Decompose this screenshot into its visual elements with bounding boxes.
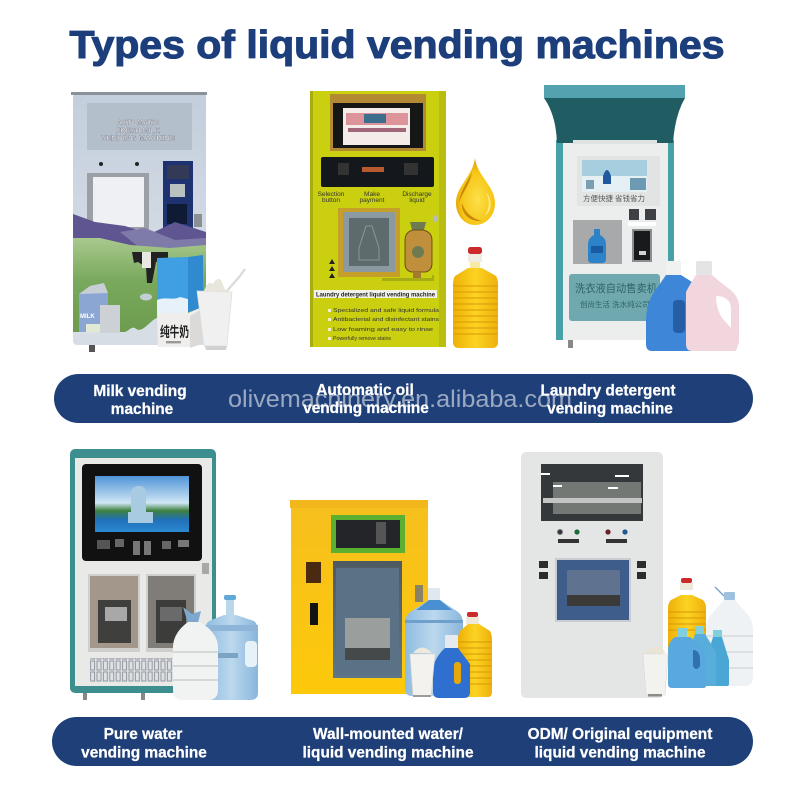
water jug [405, 588, 463, 696]
icon: oil drop [456, 158, 495, 225]
small blue bottle [709, 630, 729, 686]
panel: ODM original equipment liquid vending machine [521, 452, 753, 698]
machine body: payment [360, 197, 385, 204]
blue detergent bottle [646, 261, 692, 351]
machine body: Laundry detergent liquid vending machine [316, 292, 435, 298]
panel: automatic oil vending machine [310, 91, 498, 348]
panel: milk vending machine [71, 92, 245, 352]
machine body: Low foaming and easy to rinse [333, 327, 433, 333]
label: wall-mounted: Wall-mounted water/ [313, 726, 463, 743]
machine body [290, 500, 428, 694]
machine body: 方便快捷 省钱省力 [583, 193, 645, 203]
cow [132, 252, 168, 283]
label: pure water: Pure water [104, 726, 182, 743]
machine body: MILK [80, 314, 95, 320]
label: ODM: ODM/ Original equipment [528, 726, 712, 743]
panel: pure water vending machine [70, 449, 258, 700]
label: laundry: Laundry detergent [540, 382, 676, 400]
banner: bottom row [52, 717, 753, 766]
label: ODM: liquid vending machine [534, 744, 706, 762]
white water bottle [173, 607, 218, 700]
label: laundry: vending machine [547, 400, 673, 418]
label: wall-mounted: liquid vending machine [302, 744, 474, 762]
glass of milk [410, 648, 435, 697]
label: milk: Milk vending [93, 383, 187, 400]
machine body: AUTOMATIC [117, 118, 159, 127]
machine body: FRESH MILK [116, 126, 161, 135]
panel: wall-mounted water/liquid vending machine [290, 500, 492, 698]
machine body: Selection [318, 191, 345, 198]
milk carton [157, 255, 203, 348]
oil bottle [458, 612, 492, 697]
machine body: Make [364, 191, 380, 198]
machine body [71, 92, 207, 352]
machine body: Specialized and safe liquid formula [333, 308, 439, 314]
machine body: Powerfully remove stains [333, 336, 391, 342]
glass of milk [643, 646, 668, 696]
machine body [310, 91, 446, 347]
oil bottle [668, 578, 706, 650]
watermark: olivemachinery.en.alibaba.com [228, 386, 572, 413]
blue water jug [205, 595, 258, 700]
machine body: VENDING MACHINE [101, 134, 175, 142]
machine body [521, 452, 663, 698]
machine body [544, 85, 685, 348]
machine body: Antibacterial and disinfectant stains [333, 317, 439, 323]
label: pure water: vending machine [81, 744, 207, 762]
label: milk: machine [111, 401, 174, 418]
milk carton: 纯牛奶 [160, 324, 189, 340]
panel: laundry detergent vending machine [544, 85, 739, 351]
label: oil: Automatic oil [316, 382, 414, 399]
machine body: liquid [409, 197, 425, 204]
large blue detergent jug [668, 628, 706, 688]
oil bottle [453, 247, 498, 348]
label: oil: vending machine [303, 400, 429, 417]
machine body: 洗衣液自动售卖机 [575, 281, 657, 295]
blue detergent bottle [433, 635, 470, 698]
title: Types of liquid vending machines [70, 24, 724, 67]
machine body: button [322, 197, 340, 204]
glass of milk [197, 269, 245, 350]
machine body [70, 449, 216, 700]
machine body: 创尚生活 洗水纯公司 [580, 299, 650, 309]
machine body: Discharge [402, 191, 432, 198]
pink detergent bottle [686, 261, 739, 351]
medium blue bottle [690, 626, 716, 686]
banner: top row [54, 374, 753, 423]
water bottle [706, 587, 753, 686]
